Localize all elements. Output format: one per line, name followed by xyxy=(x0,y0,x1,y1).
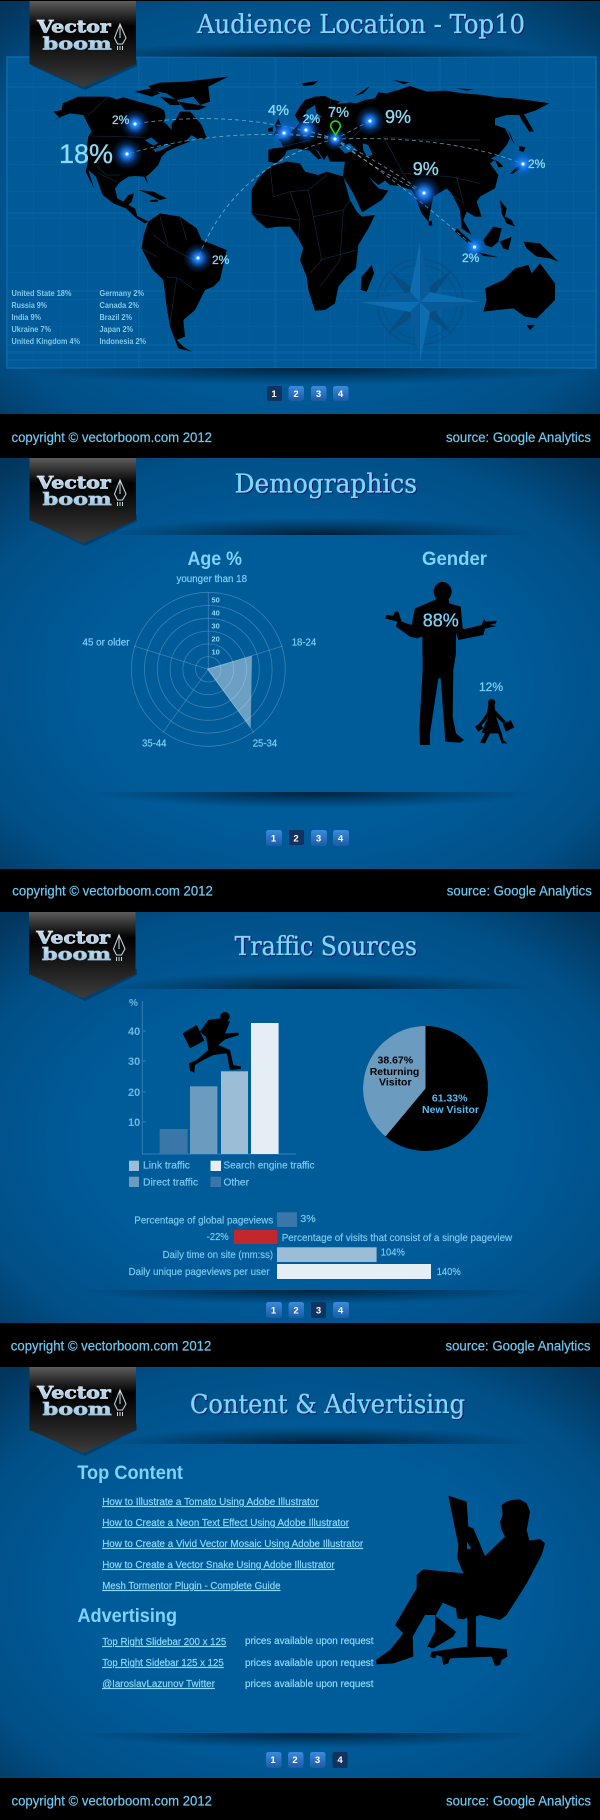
title: Traffic Sources xyxy=(235,932,417,962)
bar chart: traffic sources: 10 xyxy=(128,1117,140,1129)
footer: copyright © vectorboom.com 2012 xyxy=(11,1338,211,1354)
advertising rows: Top Right Sidebar 125 x 125 xyxy=(102,1658,224,1669)
footer: source: Google Analytics xyxy=(446,1793,591,1809)
man silhouette xyxy=(385,582,497,745)
advertising rows: prices available upon request xyxy=(245,1658,374,1669)
woman silhouette xyxy=(475,699,514,743)
country legend: United Kingdom 4% xyxy=(12,337,80,346)
radar chart: age: 50 xyxy=(212,596,220,605)
logo ribbon: boom xyxy=(43,1400,112,1419)
top shelf shadow xyxy=(105,1427,535,1444)
radar chart: age: younger than 18 xyxy=(176,573,247,585)
eurasia africa oceania xyxy=(252,80,558,330)
icon: green location pin xyxy=(331,121,340,135)
pie chart: visitors xyxy=(363,1026,488,1151)
panel background xyxy=(0,1367,600,1778)
horizontal comparison bars: Percentage of global pageviews xyxy=(134,1214,273,1226)
radar chart: age: 25-34 xyxy=(253,738,277,750)
bottom shelf shadow xyxy=(80,1290,540,1304)
label: male percentage: 88% xyxy=(423,611,459,631)
radar chart: age: 45 or older xyxy=(82,637,130,649)
footer xyxy=(0,1323,600,1367)
country legend: India 9% xyxy=(12,313,41,322)
chart legend: Direct traffic xyxy=(143,1176,198,1188)
logo ribbon: boom xyxy=(43,34,112,53)
pagination: 1 xyxy=(271,1306,277,1316)
pagination xyxy=(266,1302,349,1318)
advertising rows: Top Right Slidebar 200 x 125 xyxy=(102,1637,227,1648)
pagination: 1 xyxy=(270,1755,276,1766)
footer: source: Google Analytics xyxy=(447,883,592,899)
footer xyxy=(0,1778,600,1820)
pagination: 2 xyxy=(293,389,299,400)
title: Demographics xyxy=(235,470,417,500)
logo ribbon: Vector xyxy=(36,1384,111,1402)
pie chart: visitors: Visitor xyxy=(379,1076,412,1088)
radar chart: age: 35-44 xyxy=(142,738,167,750)
map frame xyxy=(7,57,596,368)
radar chart: age: 40 xyxy=(212,609,220,618)
label: female percentage: 12% xyxy=(479,680,503,694)
great lakes xyxy=(145,137,172,152)
percentage labels on map: 2% xyxy=(528,157,546,171)
pagination: 3 xyxy=(316,834,321,844)
americas xyxy=(50,77,228,352)
pagination: 4 xyxy=(337,1755,343,1766)
chart legend: Search engine traffic xyxy=(224,1160,314,1172)
bar chart: traffic sources: % xyxy=(129,998,138,1009)
horizontal comparison bars: 3% xyxy=(300,1213,316,1225)
country legend: Indonesia 2% xyxy=(100,337,146,346)
percentage labels on map: 2% xyxy=(303,112,320,126)
panel: demographics xyxy=(0,458,600,912)
top content links: Mesh Tormentor Plugin - Complete Guide xyxy=(102,1581,281,1592)
pie chart: visitors: New Visitor xyxy=(422,1104,479,1116)
pagination: 2 xyxy=(293,1306,299,1316)
country legend xyxy=(12,289,146,346)
country legend: Germany 2% xyxy=(100,289,144,298)
bar chart: traffic sources: 40 xyxy=(128,1026,140,1038)
borders eurasia africa xyxy=(252,100,480,287)
bar chart: traffic sources xyxy=(128,998,296,1154)
pagination: 2 xyxy=(293,834,299,844)
pagination xyxy=(267,386,348,401)
percentage labels on map: 18% xyxy=(59,139,113,169)
footer xyxy=(0,869,600,912)
footer xyxy=(0,414,600,458)
horizontal comparison bars: Daily unique pageviews per user xyxy=(129,1266,270,1278)
pagination: 3 xyxy=(315,1755,320,1766)
chart legend xyxy=(129,1160,314,1188)
top content links: How to Illustrate a Tomato Using Adobe Illustrator xyxy=(102,1497,319,1508)
gap between hands and newspaper xyxy=(467,1542,471,1549)
percentage labels on map: 2% xyxy=(112,113,130,127)
country legend: Ukraine 7% xyxy=(12,325,51,334)
bottom shelf shadow xyxy=(90,792,540,808)
reader silhouette xyxy=(376,1496,545,1666)
top content links: How to Create a Vector Snake Using Adobe Illustrator xyxy=(102,1560,335,1571)
title: Content & Advertising xyxy=(190,1390,465,1420)
pagination: 4 xyxy=(338,389,344,400)
logo ribbon xyxy=(30,1,137,90)
logo ribbon: Vector xyxy=(36,474,111,492)
top content links: How to Create a Neon Text Effect Using Adobe Illustrator xyxy=(102,1518,350,1529)
connection arcs xyxy=(127,119,523,258)
title: Audience Location - Top10 xyxy=(196,10,525,40)
horizontal comparison bars: Daily time on site (mm:ss) xyxy=(163,1249,273,1261)
bar chart: traffic sources: 20 xyxy=(128,1087,140,1099)
percentage labels on map: 7% xyxy=(328,105,349,121)
percentage labels on map: 9% xyxy=(385,107,411,127)
panel background xyxy=(0,912,600,1323)
radar chart: age: 30 xyxy=(212,622,220,631)
runner silhouette xyxy=(183,1012,241,1073)
advertising rows: @IaroslavLazunov Twitter xyxy=(102,1679,216,1690)
heading: top content: Top Content xyxy=(77,1463,184,1484)
horizontal comparison bars: 140% xyxy=(437,1266,461,1278)
chart legend: Other xyxy=(224,1176,249,1188)
glowing location dots xyxy=(111,106,537,273)
percentage labels on map: 2% xyxy=(462,251,480,265)
radar chart: age xyxy=(82,573,316,750)
panel: audience location xyxy=(0,1,600,458)
top content links xyxy=(102,1497,364,1592)
country legend: Brazil 2% xyxy=(100,313,132,322)
top shelf shadow xyxy=(105,972,535,989)
pie chart: visitors: 61.33% xyxy=(432,1093,468,1105)
pagination: 3 xyxy=(316,389,321,400)
radar chart: age: 18-24 xyxy=(292,637,316,649)
logo ribbon: Vector xyxy=(35,928,110,948)
world map xyxy=(50,77,558,352)
pie chart: visitors: Returning xyxy=(370,1066,419,1078)
footer: copyright © vectorboom.com 2012 xyxy=(12,883,213,899)
country legend: United State 18% xyxy=(12,289,72,298)
compass rose xyxy=(360,242,480,362)
inland seas xyxy=(305,105,373,157)
chart legend: Link traffic xyxy=(143,1160,190,1172)
panel background xyxy=(0,458,600,869)
panel: content and advertising xyxy=(0,1367,600,1820)
country legend: Japan 2% xyxy=(100,325,133,334)
pagination xyxy=(266,830,349,846)
radar chart: age: 20 xyxy=(212,635,220,644)
pagination: 2 xyxy=(292,1755,298,1766)
pie chart: visitors: 38.67% xyxy=(377,1055,414,1067)
footer: copyright © vectorboom.com 2012 xyxy=(12,429,212,445)
bar chart: traffic sources: 30 xyxy=(128,1056,140,1068)
logo ribbon: boom xyxy=(42,945,112,964)
footer: copyright © vectorboom.com 2012 xyxy=(12,1793,212,1809)
percentage labels on map: 4% xyxy=(268,103,289,119)
logo ribbon xyxy=(29,912,137,1001)
borders americas xyxy=(88,97,195,323)
percentage labels on map: 9% xyxy=(413,159,439,179)
advertising rows: prices available upon request xyxy=(245,1636,374,1647)
horizontal comparison bars: -22% xyxy=(207,1231,229,1243)
top shelf shadow xyxy=(105,518,535,535)
panel background xyxy=(0,1,600,414)
advertising rows xyxy=(102,1636,374,1690)
horizontal comparison bars: Percentage of visits that consist of a single pageview xyxy=(282,1232,513,1244)
horizontal comparison bars xyxy=(129,1212,513,1279)
pagination: 1 xyxy=(271,834,277,844)
pagination: 3 xyxy=(316,1306,321,1316)
shadow under title xyxy=(70,42,570,57)
country legend: Canada 2% xyxy=(100,301,139,310)
panel: traffic sources xyxy=(0,912,600,1367)
radar chart: age: 10 xyxy=(212,648,220,657)
pagination: 4 xyxy=(338,1306,344,1316)
logo ribbon: boom xyxy=(43,490,112,509)
pagination: 1 xyxy=(271,389,277,400)
percentage labels on map xyxy=(59,103,546,267)
shadow under map xyxy=(20,368,590,385)
percentage labels on map: 2% xyxy=(212,253,230,267)
pagination: 4 xyxy=(338,834,344,844)
logo ribbon xyxy=(30,1367,137,1456)
heading: gender: Gender xyxy=(422,549,488,570)
bottom shelf shadow xyxy=(80,1733,540,1748)
footer: source: Google Analytics xyxy=(446,429,591,445)
country legend: Russia 9% xyxy=(12,301,47,310)
heading: age: Age % xyxy=(188,549,242,570)
heading: advertising: Advertising xyxy=(78,1606,177,1627)
horizontal comparison bars: 104% xyxy=(381,1247,405,1259)
footer: source: Google Analytics xyxy=(446,1338,590,1354)
logo ribbon xyxy=(30,458,137,546)
top content links: How to Create a Vivid Vector Mosaic Using Adobe Illustrator xyxy=(102,1539,364,1550)
logo ribbon: Vector xyxy=(36,18,111,37)
advertising rows: prices available upon request xyxy=(245,1679,374,1690)
pagination xyxy=(266,1752,348,1768)
